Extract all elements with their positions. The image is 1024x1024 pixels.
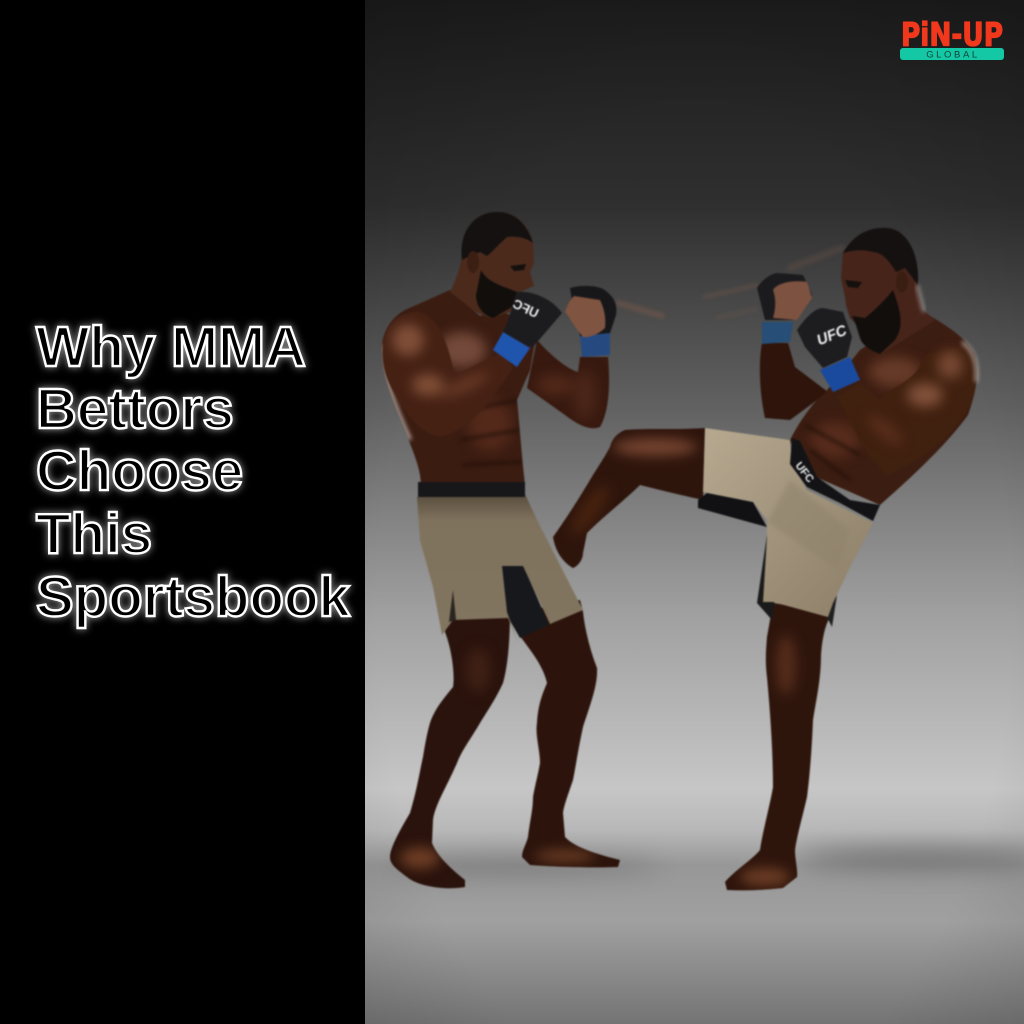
beard [476,270,517,318]
raised leg [553,428,705,568]
title [30,315,356,635]
fighter: left [382,212,620,888]
near glove [797,308,852,368]
shorts fabric [417,494,583,643]
back glove [570,286,616,336]
front glove [503,292,562,347]
side slit [449,590,456,622]
black panel lower [757,535,775,620]
right shorts [698,428,880,627]
title: This [36,502,152,565]
title: Choose [36,439,243,502]
hair [843,228,918,285]
hair [461,212,533,260]
back arm [527,340,609,428]
waistband [790,438,880,521]
fighter: right [553,228,977,890]
front wrist wrap [493,332,530,367]
title: Sportsbook [36,565,350,628]
logo subtitle: GLOBAL [926,50,980,60]
front leg [520,600,620,867]
beard [852,290,901,354]
standing leg [725,603,830,890]
glove logo: UFC [814,321,850,349]
eye [845,280,862,288]
near arm [383,312,513,436]
back hand [565,296,605,337]
waistband logo: UFC [793,460,816,485]
title: Bettors [36,377,234,440]
panel: photo background [365,0,1024,1024]
far arm [760,343,828,420]
shorts fold shading [767,480,850,570]
neck rim light [917,285,924,312]
rear slit [826,595,837,627]
logo: Pin-Up Global [900,16,1004,60]
glove logo: UFC [510,296,541,321]
shorts fabric [703,428,873,617]
head [450,212,534,318]
far hand [773,281,812,320]
motion blur streaks [618,248,842,318]
logo wordmark: PiN-UP [901,16,1003,54]
near arm [837,345,976,475]
far wrist wrap [762,322,793,344]
panel: left text column [0,0,365,1024]
waistband [418,482,525,497]
black panel upper [698,493,767,527]
ear [467,251,479,273]
body highlights [565,357,921,886]
logo teal bar [900,48,1004,60]
near arm highlights [392,324,491,401]
black panel [500,565,549,638]
back leg [390,608,510,888]
body highlights [384,332,597,869]
eye [510,264,526,271]
head [841,228,935,355]
torso [790,310,977,505]
shoulder rim light [962,342,976,382]
title: Why MMA [36,315,306,378]
torso [382,290,537,484]
left shorts [417,482,583,643]
ear [896,271,908,293]
near arm highlights [864,351,963,450]
back wrist wrap [580,333,610,357]
near wrist wrap [820,357,860,392]
far glove [757,273,812,320]
